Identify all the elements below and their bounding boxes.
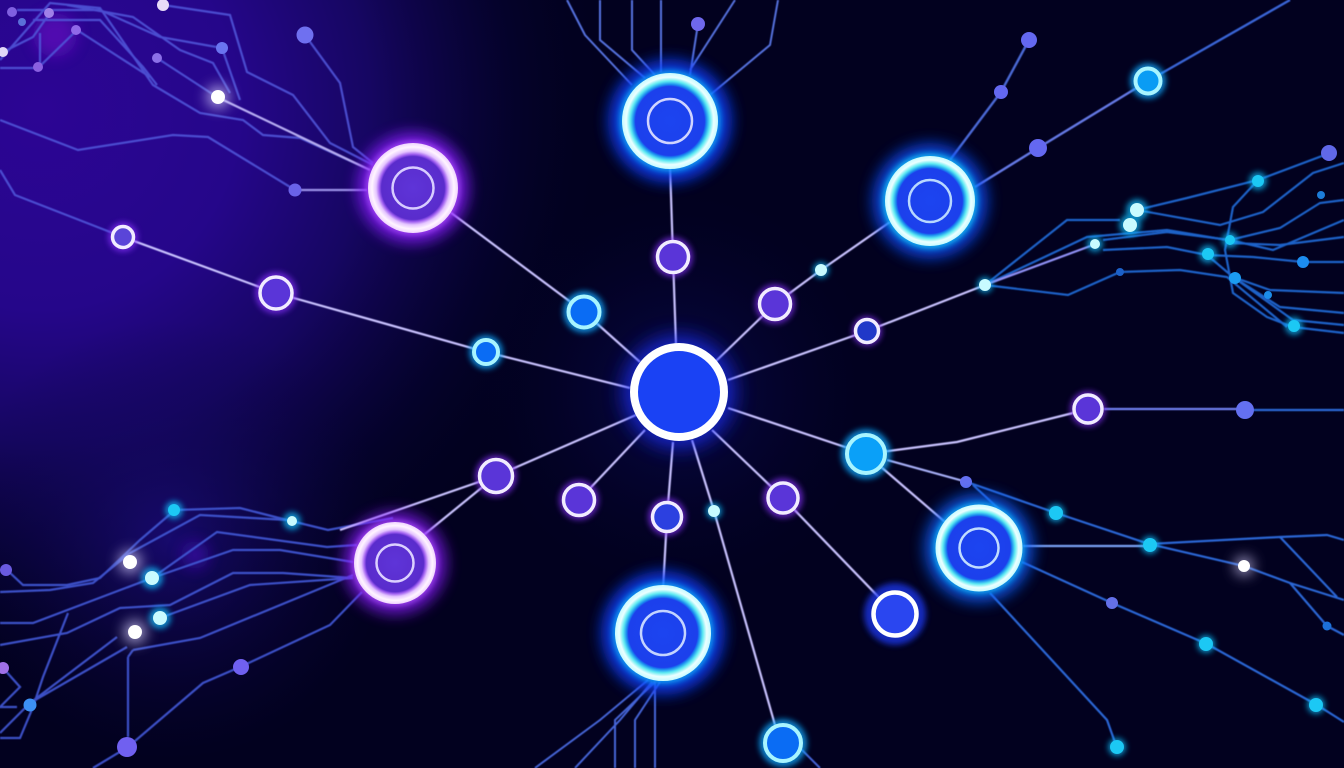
bottom centre lines — [535, 680, 820, 768]
blue ringed node bottom right — [864, 583, 926, 645]
large node: right — [924, 493, 1034, 603]
right lower lines — [887, 409, 1344, 748]
large node: top left purple — [357, 132, 469, 244]
bottom-left circuit lines — [0, 508, 393, 768]
large node: bottom centre — [601, 571, 725, 695]
glowing white dots — [119, 86, 1253, 643]
right circuit lines — [985, 153, 1344, 333]
medium ringed nodes: purple — [108, 222, 1106, 536]
top centre lines — [567, 0, 778, 95]
glowing cyan dots — [141, 172, 1325, 756]
central hub — [623, 336, 735, 448]
large node: top right — [872, 143, 988, 259]
large node: top centre — [608, 59, 732, 183]
top right lines — [950, 0, 1290, 187]
large node: bottom left purple — [343, 511, 447, 615]
spokes from hub — [123, 165, 1073, 725]
top-left purple circuit lines — [0, 3, 373, 237]
medium ringed nodes: cyan — [469, 63, 1166, 767]
